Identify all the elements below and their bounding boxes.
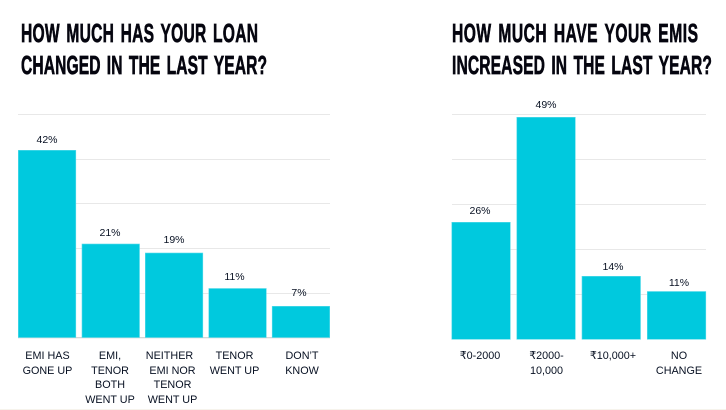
bar: don't know 7%	[272, 287, 330, 338]
category labels: loan change: WENT UP	[210, 365, 259, 377]
heading: EMI increase: INCREASED IN THE LAST YEAR?	[452, 51, 712, 80]
category labels: loan change: NEITHER	[146, 350, 193, 362]
category labels: EMI increase: ₹0-2000	[460, 350, 500, 362]
bar: ₹10,000+ 14%: 14%	[602, 261, 624, 273]
heading: EMI increase: HOW MUCH HAVE YOUR EMIS	[452, 19, 698, 48]
bar: tenor went up 11%	[209, 271, 266, 338]
bar: EMI has gone up 42%	[18, 134, 76, 338]
bar: ₹0-2000 26%	[452, 205, 510, 339]
bar chart: loan change	[18, 134, 330, 338]
bar: ₹0-2000 26%: 26%	[469, 205, 491, 217]
category labels: loan change: KNOW	[285, 365, 320, 377]
category labels: EMI increase: 10,000	[530, 365, 563, 377]
bar: EMI, tenor both went up 21%	[82, 227, 140, 338]
category labels: loan change: GONE UP	[23, 365, 72, 377]
bar: ₹2000-10,000 49%	[517, 99, 575, 339]
category labels: loan change	[23, 350, 320, 406]
category labels: loan change: DON’T	[286, 350, 319, 362]
bar chart: EMI increase	[452, 99, 706, 339]
bar: no change 11%: 11%	[669, 277, 689, 289]
category labels: EMI increase: ₹2000-	[529, 350, 564, 362]
bar: no change 11%	[647, 277, 706, 339]
heading: loan change: CHANGED IN THE LAST YEAR?	[21, 51, 267, 80]
category labels: loan change: BOTH	[95, 379, 125, 391]
bar: don't know 7%: 7%	[291, 287, 307, 299]
category labels: EMI increase: NO	[671, 350, 687, 362]
category labels: loan change: TENOR	[91, 365, 129, 377]
heading: loan change	[21, 19, 267, 80]
bar: neither went up 19%: 19%	[163, 234, 185, 246]
heading: EMI increase	[452, 19, 712, 80]
bar: EMI has gone up 42%: 42%	[36, 134, 58, 146]
heading: loan change: HOW MUCH HAS YOUR LOAN	[21, 19, 258, 48]
category labels: EMI increase	[460, 350, 702, 377]
category labels: loan change: EMI NOR	[149, 365, 196, 377]
category labels: loan change: EMI,	[99, 350, 121, 362]
category labels: loan change: WENT UP	[85, 394, 135, 406]
bar: EMI, tenor both went up 21%: 21%	[99, 227, 121, 239]
bar: ₹2000-10,000 49%: 49%	[535, 99, 557, 111]
bar: neither went up 19%	[145, 234, 203, 338]
category labels: loan change: TENOR	[154, 379, 192, 391]
panel: loan change	[18, 19, 330, 406]
category labels: loan change: TENOR	[216, 350, 254, 362]
category labels: loan change: WENT UP	[148, 394, 197, 406]
category labels: loan change: EMI HAS	[25, 350, 70, 362]
category labels: EMI increase: ₹10,000+	[590, 350, 636, 362]
panel: EMI increase	[452, 19, 712, 377]
bar: ₹10,000+ 14%	[582, 261, 640, 339]
category labels: EMI increase: CHANGE	[656, 365, 702, 377]
bar: tenor went up 11%: 11%	[224, 271, 245, 283]
